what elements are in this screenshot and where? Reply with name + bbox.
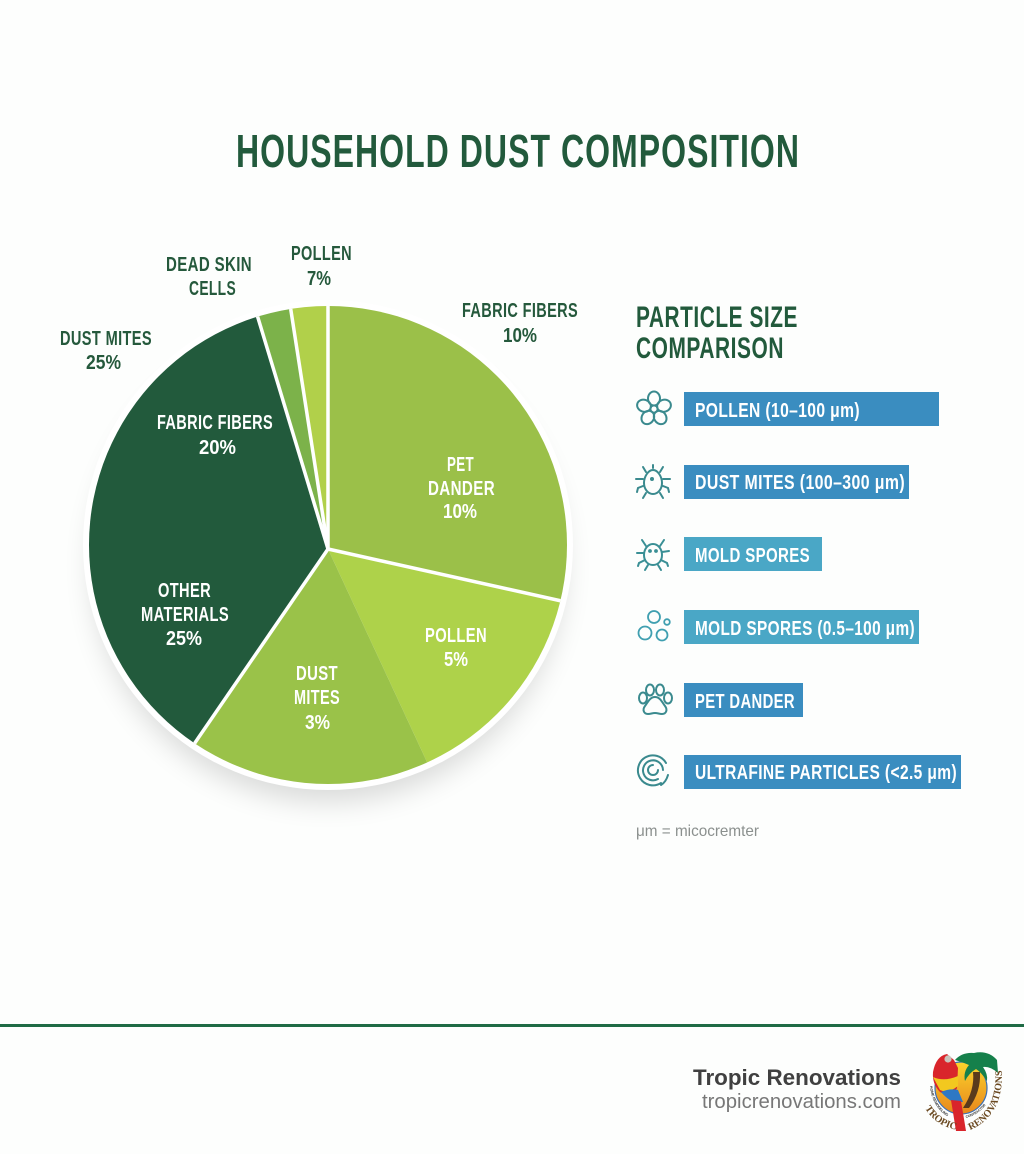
footer brand text: Tropic Renovations [693, 1065, 901, 1090]
footer brand text: tropicrenovations.com [702, 1091, 901, 1113]
bar: dust mites [684, 465, 909, 499]
label: pollen 7% [291, 243, 352, 290]
logo contractor arc text: CONTRACTOR [966, 1104, 986, 1118]
icon: dust mite [636, 465, 670, 498]
bar: pollen [684, 392, 939, 426]
bar: mold spores size [684, 610, 919, 644]
label: fabric fibers 20%: FABRIC FIBERS [157, 412, 273, 434]
heading: particle size comparison: COMPARISON [636, 332, 784, 365]
logo wordmark renovations: RENOVATIONS [967, 1070, 1002, 1130]
label: other materials 25%: 25% [166, 628, 202, 650]
label: fabric fibers 10%: FABRIC FIBERS [462, 300, 578, 322]
bar: ultrafine particles [684, 755, 961, 789]
label: dead skin cells: CELLS [189, 278, 236, 300]
bar: mold spores size: MOLD SPORES (0.5–100 μm) [695, 618, 915, 640]
slice: pollen [329, 551, 560, 762]
parrot blue wing [941, 1089, 963, 1102]
bar: dust mites: DUST MITES (100–300 μm) [695, 472, 905, 494]
label: pollen 5%: POLLEN [425, 625, 487, 647]
label: pet dander 10%: 10% [443, 501, 477, 523]
slice: dead skin cells [258, 308, 323, 526]
label: pet dander 10%: PET [447, 454, 474, 476]
bar: pet dander [684, 683, 803, 717]
slice dividers [190, 295, 566, 750]
footnote: μm = micocremter [636, 823, 760, 840]
bar: mold spores: MOLD SPORES [695, 545, 810, 567]
slice: dust mites [195, 551, 427, 784]
icon: spores circles [638, 611, 670, 640]
title: HOUSEHOLD DUST COMPOSITION [236, 125, 800, 177]
footer brand text [693, 1065, 901, 1113]
label: other materials 25%: OTHER [158, 580, 211, 602]
icon: mold spore [637, 540, 669, 570]
label: other materials 25% [141, 580, 229, 650]
logo palm trunk [963, 1072, 980, 1108]
footer rule [0, 1024, 1024, 1027]
icon: pollen flower [636, 392, 672, 427]
heading: particle size comparison: PARTICLE SIZE [636, 301, 798, 334]
logo palm fronds [955, 1052, 998, 1081]
label: fabric fibers 20%: 20% [199, 437, 236, 459]
parrot body [933, 1054, 958, 1098]
parrot yellow wing [933, 1076, 958, 1091]
bar: ultrafine particles: ULTRAFINE PARTICLES (<2.5 μm) [695, 762, 957, 784]
bar: pollen: POLLEN (10–100 μm) [695, 400, 860, 422]
pie white ring [83, 300, 573, 790]
label: pollen 5%: 5% [444, 649, 468, 671]
outer labels [60, 243, 578, 374]
icon: paw print [639, 684, 672, 714]
pie slices [89, 306, 567, 784]
label: fabric fibers 10%: 10% [503, 325, 537, 347]
logo small arc text: HOME REMODELING [930, 1086, 948, 1116]
inner labels [141, 412, 495, 734]
logo [926, 1052, 1002, 1131]
label: other materials 25%: MATERIALS [141, 604, 229, 626]
slice: other materials and fabric fibers [89, 316, 326, 744]
parrot face [944, 1055, 952, 1063]
logo sun [935, 1062, 987, 1114]
slice: small pollen [291, 306, 326, 528]
label: dust mites 25%: 25% [86, 352, 121, 374]
heading: particle size comparison [636, 301, 798, 365]
label: fabric fibers 20% [157, 412, 273, 459]
label: dust mites 3%: MITES [294, 687, 340, 709]
label: pet dander 10%: DANDER [428, 478, 495, 500]
label: dust mites 25%: DUST MITES [60, 328, 152, 350]
label: dust mites 3%: DUST [296, 663, 338, 685]
label: dead skin cells: DEAD SKIN [166, 254, 252, 276]
label: pollen 5% [425, 625, 487, 671]
label: pollen 7%: 7% [307, 268, 331, 290]
label: dead skin cells [166, 254, 252, 300]
label: dust mites 3% [294, 663, 340, 734]
label: pollen 7%: POLLEN [291, 243, 352, 265]
icon: ultrafine spiral [638, 755, 668, 785]
pie chart [70, 290, 600, 802]
logo wordmark tropic: TROPIC [926, 1104, 957, 1130]
label: dust mites 25% [60, 328, 152, 374]
label: dust mites 3%: 3% [305, 712, 330, 734]
label: pet dander 10% [428, 454, 495, 523]
bar: pet dander: PET DANDER [695, 691, 795, 713]
label: fabric fibers 10% [462, 300, 578, 347]
bar: mold spores [684, 537, 822, 571]
parrot tail [951, 1100, 966, 1131]
pie shadow [92, 330, 564, 802]
logo parrot [933, 1054, 966, 1131]
slice: pet dander [330, 306, 567, 601]
